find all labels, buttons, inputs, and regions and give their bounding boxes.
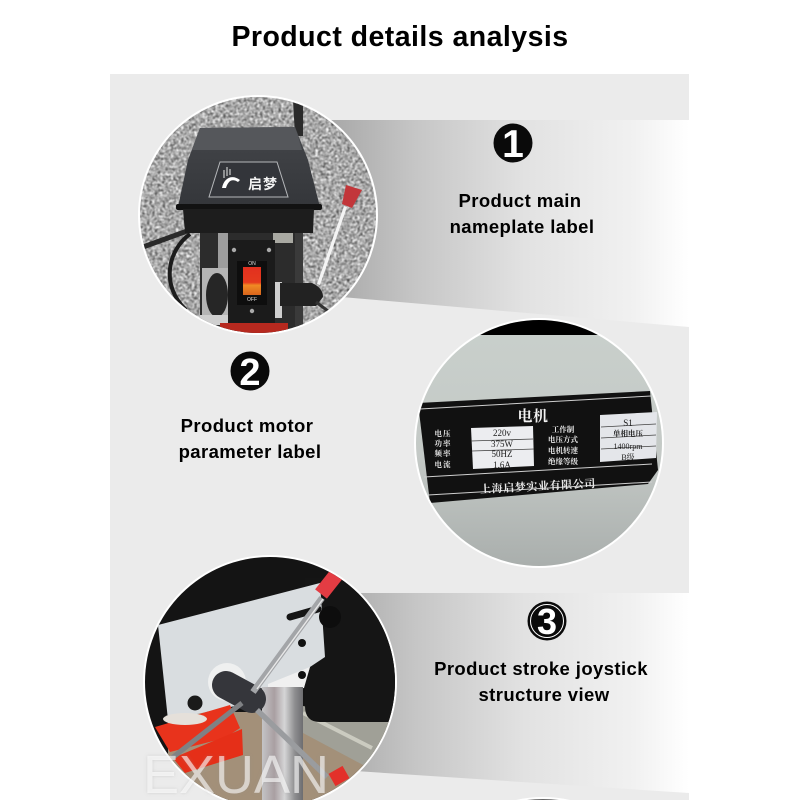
photo: motor parameter plate: 电机 — [517, 407, 549, 425]
text: label 1: nameplate label — [450, 216, 594, 237]
panel: gray background — [110, 74, 689, 800]
text: label 3: structure view — [478, 684, 610, 705]
icon: number 2 badge: 2 — [239, 352, 261, 394]
photo: motor parameter plate: 375W — [491, 439, 514, 449]
icon: number 1 badge: 1 — [502, 123, 524, 166]
photo: drill press head with nameplate and switch: 启梦 — [248, 176, 278, 192]
photo: motor parameter plate: B级 — [621, 453, 635, 462]
photo: motor parameter plate: 50HZ — [492, 449, 512, 459]
photo: motor parameter plate: 绝缘等级 — [548, 456, 578, 466]
icon: number 2 badge — [230, 352, 270, 394]
photo: next circle partly visible at bottom — [516, 797, 570, 800]
text: label 3 — [434, 658, 648, 705]
text: label 2: parameter label — [179, 441, 321, 462]
photo: drill press head with nameplate and switch — [138, 95, 378, 335]
photo: motor parameter plate: 上海启梦实业有限公司 — [480, 476, 596, 496]
text: label 2 — [179, 415, 321, 462]
photo: stroke joystick assembly — [143, 555, 397, 800]
photo: motor parameter plate: 工作制 — [552, 424, 575, 434]
photo: motor parameter plate: S1 — [623, 418, 633, 428]
photo: motor parameter plate: 电流 — [434, 459, 452, 469]
title: Product details analysis — [231, 21, 569, 53]
text: label 3: Product stroke joystick — [434, 658, 648, 679]
photo: motor parameter plate: 单相电压 — [613, 428, 643, 438]
icon: number 3 badge — [528, 601, 566, 642]
panel: gradient band 1 — [320, 120, 689, 327]
photo: drill press head with nameplate and switch: ON — [248, 261, 256, 267]
photo: motor parameter plate: 功率 — [434, 438, 452, 448]
photo: motor parameter plate: 电压 — [434, 428, 452, 438]
text: label 1 — [450, 190, 594, 237]
photo: drill press head with nameplate and switch: OFF — [247, 297, 257, 303]
photo: motor parameter plate — [414, 318, 664, 568]
photo: motor parameter plate: 220v — [493, 428, 512, 438]
photo: motor parameter plate: 1.6A — [493, 460, 511, 470]
photo: motor parameter plate: 电压方式 — [548, 434, 578, 444]
icon: number 1 badge — [494, 123, 532, 166]
icon: number 3 badge: 3 — [537, 601, 557, 642]
photo: motor parameter plate: 频率 — [434, 448, 452, 458]
text: label 1: Product main — [458, 190, 582, 211]
panel: gradient band 3 — [320, 593, 689, 793]
photo: motor parameter plate: 1400rpm — [614, 442, 643, 451]
text: label 2: Product motor — [181, 415, 313, 436]
photo: motor parameter plate: 电机转速 — [548, 445, 578, 455]
